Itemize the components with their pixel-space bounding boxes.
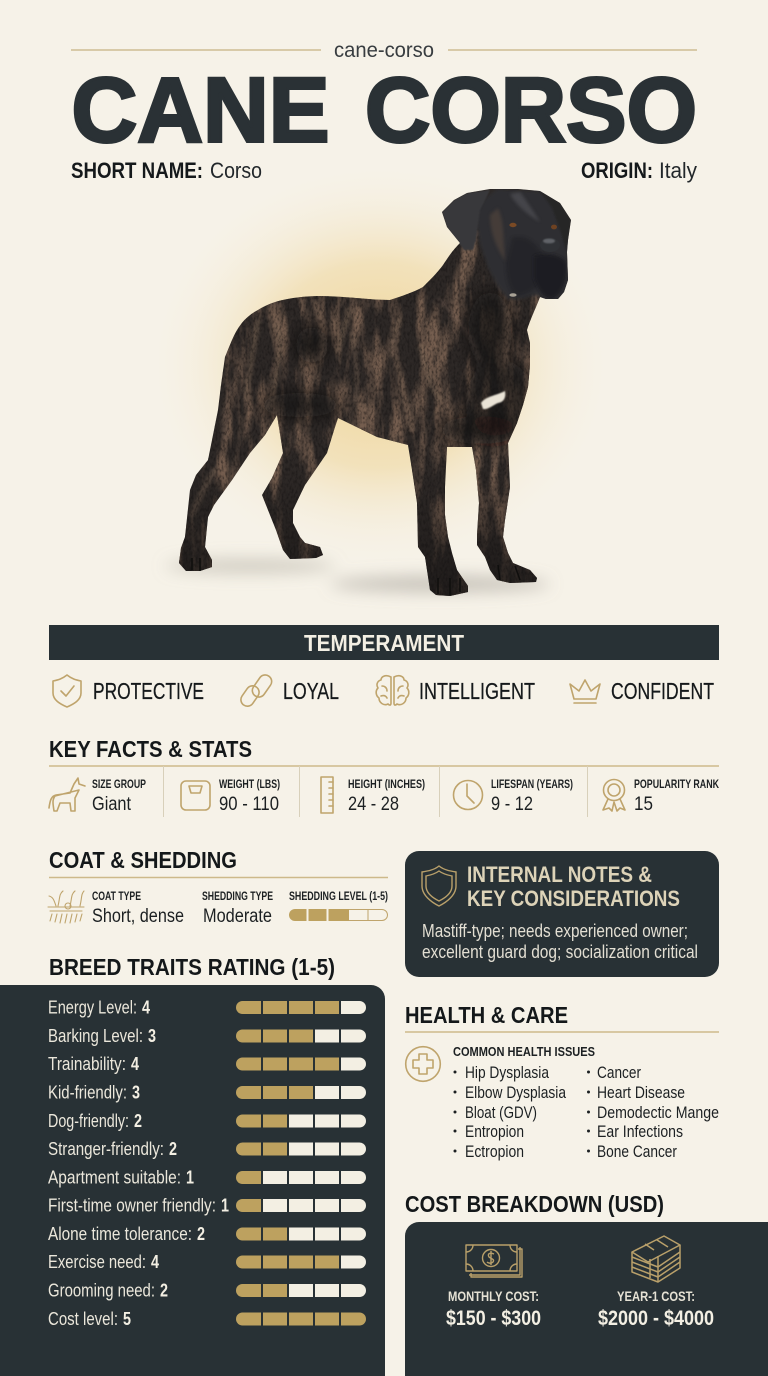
icon: ruler [321,777,333,813]
fact: popularity rank: POPULARITY RANK [634,777,719,791]
fact: size group: SIZE GROUP [92,777,146,791]
heading: cost breakdown: COST BREAKDOWN (USD) [405,1191,664,1217]
illustration: brindle cane corso [170,189,571,605]
health list column 2: Heart Disease [597,1083,685,1102]
temperament banner [49,625,719,660]
notes body: excellent guard dog; socialization critical [422,942,698,962]
icon: crown [570,680,600,703]
row: energy level [48,998,366,1018]
fact: size group [92,777,146,815]
row: grooming need [48,1280,366,1300]
row: apartment suitable: Apartment suitable: [48,1168,181,1188]
health list column 2: Cancer [597,1063,641,1082]
fact: lifespan: 9 - 12 [491,794,533,815]
health list column 1: Ectropion [465,1142,524,1161]
row: dog-friendly [48,1111,366,1131]
icon: chain link [238,672,274,709]
year-1 cost: YEAR-1 COST: [617,1288,695,1304]
panel: cost breakdown [405,1222,768,1376]
row: kid-friendly [48,1082,366,1102]
row: first-time owner friendly: First-time owner friendly: [48,1196,216,1216]
coat type: COAT TYPE [92,889,141,903]
origin: Italy [659,158,697,183]
fact: lifespan [491,777,573,815]
label: confident: CONFIDENT [611,678,714,704]
row: barking level [48,1026,366,1046]
facts divider lines [49,765,719,767]
row: dog-friendly: Dog-friendly: [48,1111,129,1131]
fact: size group: Giant [92,794,132,815]
notes heading: KEY CONSIDERATIONS [467,886,680,911]
notes body: Mastiff-type; needs experienced owner; [422,921,688,941]
health subheading: COMMON HEALTH ISSUES [453,1044,595,1059]
row: trainability: 4 [131,1054,139,1074]
muzzle tip [509,293,517,297]
fact: weight: WEIGHT (LBS) [219,777,280,791]
nose [540,238,560,252]
row: dog-friendly: 2 [134,1111,142,1131]
row: alone time tolerance: Alone time tolerance: [48,1224,192,1244]
header label: cane-corso: cane-corso [334,39,434,62]
row: barking level: Barking Level: [48,1026,143,1046]
row: apartment suitable: 1 [186,1168,194,1188]
icon: medical cross [406,1047,440,1081]
fact: popularity rank [634,777,719,815]
label: protective: PROTECTIVE [93,678,204,704]
fact: height [348,777,425,815]
health rule [405,1031,719,1033]
fact: popularity rank: 15 [634,794,653,815]
row: first-time owner friendly [48,1196,366,1216]
fact: weight [219,777,280,815]
monthly cost: $150 - $300 [446,1307,541,1330]
fact: height: HEIGHT (INCHES) [348,777,425,791]
title: CANE [72,60,330,162]
icon: notes shield [422,866,456,906]
panel: breed traits rating [0,985,385,1376]
health list column 1: Entropion [465,1122,524,1141]
row: trainability: Trainability: [48,1054,126,1074]
row: alone time tolerance [48,1224,366,1244]
temperament traits row [53,672,714,709]
short name: Corso [210,158,262,183]
background glow behind dog [145,160,615,570]
row: grooming need: Grooming need: [48,1280,155,1300]
row: alone time tolerance: 2 [197,1224,205,1244]
shedding type: Moderate [203,906,272,927]
row: stranger-friendly: Stranger-friendly: [48,1139,164,1159]
row: kid-friendly: Kid-friendly: [48,1082,127,1102]
health list column 2: Bone Cancer [597,1142,677,1161]
year-1 cost: $2000 - $4000 [598,1307,714,1330]
row: first-time owner friendly: 1 [221,1196,229,1216]
row: kid-friendly: 3 [132,1082,140,1102]
notes heading [467,862,680,911]
panel: internal notes [405,851,719,977]
row: cost level [48,1309,366,1329]
short name: SHORT NAME: [71,158,203,183]
row: energy level: Energy Level: [48,998,137,1018]
paw toes [192,558,520,595]
panel: health and care [405,1002,719,1161]
row: barking level: 3 [148,1026,156,1046]
row: exercise need: Exercise need: [48,1252,146,1272]
heading: key facts and stats: KEY FACTS & STATS [49,736,252,762]
row: stranger-friendly: 2 [169,1139,177,1159]
icon: award ribbon [603,780,625,811]
health list column 2 [587,1063,719,1161]
label: intelligent: INTELLIGENT [419,678,535,704]
row: grooming need: 2 [160,1280,168,1300]
fact: lifespan: LIFESPAN (YEARS) [491,777,573,791]
coat type: Short, dense [92,906,184,927]
row: energy level: 4 [142,998,150,1018]
heading: breed traits: BREED TRAITS RATING (1-5) [49,954,335,980]
coat rule [49,876,388,878]
eyes [509,223,517,227]
icon: clock [454,780,482,810]
row: trainability [48,1054,366,1074]
monthly cost [446,1288,541,1330]
fact: height: 24 - 28 [348,794,399,815]
health list column 1: Hip Dysplasia [465,1063,549,1082]
row: exercise need: 4 [151,1252,159,1272]
title [72,60,697,162]
shedding level meter [289,889,388,921]
shedding type: SHEDDING TYPE [202,889,273,903]
panel: coat and shedding [48,847,388,927]
row: apartment suitable [48,1168,366,1188]
health list column 1 [454,1063,566,1161]
health list column 2: Ear Infections [597,1122,683,1141]
health list column 2: Demodectic Mange [597,1103,719,1122]
row: stranger-friendly [48,1139,366,1159]
shedding type [202,889,273,927]
dark shading [260,292,534,444]
ground shadow [165,559,550,592]
icon: shield [53,675,81,707]
notes heading: INTERNAL NOTES & [467,862,652,887]
coat type [92,889,184,927]
icon: banknotes [466,1245,522,1277]
temperament banner: TEMPERAMENT [304,630,464,656]
head [476,189,570,301]
chest patch [481,391,505,409]
row: exercise need [48,1252,366,1272]
icon: dog [49,778,85,811]
heading: health and care: HEALTH & CARE [405,1002,568,1028]
icon: hair follicles [48,891,84,923]
monthly cost: MONTHLY COST: [448,1288,539,1304]
origin: ORIGIN: [581,158,653,183]
icon: brain [376,676,409,705]
panel: key facts [49,736,719,817]
fact: weight: 90 - 110 [219,794,279,815]
notes body [422,921,698,962]
health list column 1: Elbow Dysplasia [465,1083,566,1102]
ears [442,190,490,250]
label: loyal: LOYAL [283,678,339,704]
heading: coat and shedding: COAT & SHEDDING [49,847,237,873]
row: cost level: 5 [123,1309,131,1329]
title: CORSO [365,60,697,162]
icon: weight scale [181,781,210,810]
row: cost level: Cost level: [48,1309,118,1329]
shedding level meter: SHEDDING LEVEL (1-5) [289,889,388,903]
icon: cash stack [632,1236,680,1282]
health list column 1: Bloat (GDV) [465,1103,537,1122]
year-1 cost [598,1288,714,1330]
